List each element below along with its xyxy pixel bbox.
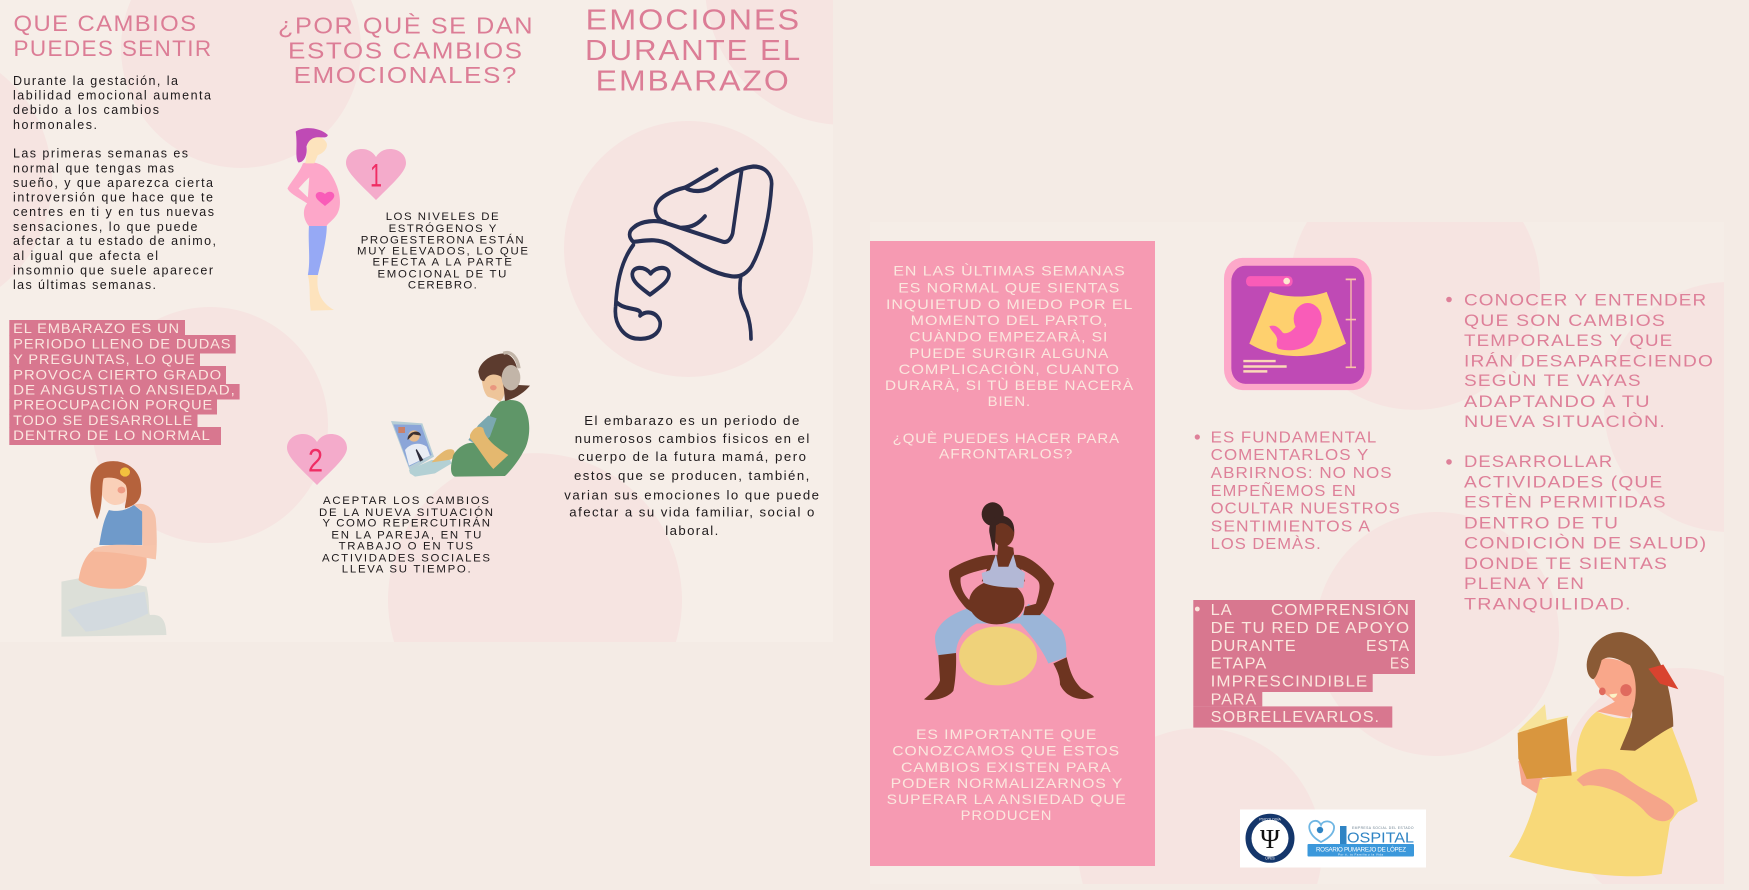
list: es fundamental comentarlos: COMENTARLOS Y [1211,447,1369,464]
text block: las primeras semanas: Las primeras semanas es [13,147,188,161]
text block: ultimas semanas: INQUIETUD O MIEDO POR EL [886,297,1133,312]
text block: es importante que conozcamos: ES IMPORTANTE QUE [916,727,1097,742]
text block: durante la gestacion: labilidad emocional aumenta [13,88,211,102]
title: emociones durante el embarazo: DURANTE EL [585,35,802,67]
text block: durante la gestacion [13,74,211,132]
text block: el embarazo es un periodo [564,413,819,538]
list: conocer y desarrollar: IRÁN DESAPARECIENDO [1464,352,1714,371]
text block: el embarazo es un periodo: cuerpo de la futura mamá, pero [578,449,806,464]
text block: ultimas semanas: ES NORMAL QUE SIENTAS [898,280,1120,295]
logo: psicologia: Ψ [1260,824,1280,854]
callout: el embarazo es un periodo: PREOCUPACIÒN PORQUE [13,398,213,413]
callout: la comprension de tu red de apoyo: ESTA [1366,638,1410,655]
text block: las primeras semanas: sensaciones, lo que puede [13,220,198,234]
text block: el embarazo es un periodo: laboral. [665,523,718,538]
icon: pregnant belly line art [615,166,772,339]
heading: que cambios puedes sentir: QUE CAMBIOS [14,11,198,36]
logos: psicologia and hospital [1240,810,1426,868]
text block: el embarazo es un periodo: El embarazo es un periodo de [584,413,799,428]
icon: heart number 2: 2 [308,442,323,478]
text block: ultimas semanas: EN LAS ÙLTIMAS SEMANAS [893,262,1126,278]
text block: aceptar los cambios: Y COMO REPERCUTIRÁN [322,517,490,530]
list: es fundamental comentarlos: ES FUNDAMENTAL [1211,429,1377,446]
heading: por que se dan estos cambios: ESTOS CAMBIOS [288,37,524,63]
text block: ultimas semanas: ¿QUÈ PUEDES HACER PARA [893,430,1120,446]
list: conocer y desarrollar: DESARROLLAR [1464,453,1613,471]
list: conocer y desarrollar: DONDE TE SIENTAS [1464,555,1668,573]
callout: la comprension de tu red de apoyo: DURANTE [1211,638,1297,655]
text block: niveles de estrogenos: LOS NIVELES DE [386,211,499,223]
icon: heart number 2 [287,434,347,485]
panel: right brochure background [870,222,1724,884]
list: conocer y desarrollar: QUE SON CAMBIOS [1464,312,1666,330]
panel: left brochure background [0,0,833,642]
callout: la comprension de tu red de apoyo: ES [1390,656,1410,673]
text block: aceptar los cambios: EN LA PAREJA, EN TU [331,530,481,542]
list: es fundamental comentarlos: EMPEÑEMOS EN [1211,480,1357,500]
text block: durante la gestacion: debido a los cambios [13,103,159,117]
list: es fundamental comentarlos [1195,429,1401,553]
illustration: woman on birth ball [924,502,1094,700]
list: conocer y desarrollar: CONOCER Y ENTENDER [1464,292,1707,310]
text block: es importante que conozcamos: CAMBIOS EXISTEN PARA [901,760,1112,775]
logo: hospital: ROSARIO PUMAREJO DE LÓPEZ [1316,846,1406,854]
illustration: pregnant woman standing [287,128,340,311]
text block: aceptar los cambios: ACEPTAR LOS CAMBIOS [323,495,489,507]
list: es fundamental comentarlos: SENTIMIENTOS A [1211,518,1371,536]
text block: aceptar los cambios [319,495,493,576]
text block: las primeras semanas: al igual que afecta el [13,249,158,263]
callout: la comprension de tu red de apoyo: LA [1211,602,1233,619]
heading: por que se dan estos cambios: ¿POR QUÈ SE DAN [278,12,534,38]
list: conocer y desarrollar: TRANQUILIDAD. [1464,595,1632,613]
list: conocer y desarrollar: ACTIVIDADES (QUE [1464,474,1663,492]
illustration: seated pregnant woman [61,461,166,637]
logo: psicologia: UPES [1265,856,1275,860]
text block: ultimas semanas: MOMENTO DEL PARTO, [911,313,1108,328]
list: conocer y desarrollar: CONDICIÒN DE SALUD) [1464,534,1707,553]
list: conocer y desarrollar: PLENA Y EN [1464,575,1585,593]
heading: que cambios puedes sentir [14,11,212,61]
illustration: pregnant woman reading [1509,632,1698,876]
callout: la comprension de tu red de apoyo: DE TU RED DE APOYO [1211,620,1410,637]
text block: es importante que conozcamos [887,727,1127,823]
text block: es importante que conozcamos: SUPERAR LA ANSIEDAD QUE [887,792,1127,807]
callout: el embarazo es un periodo: Y PREGUNTAS, LO QUE [13,352,196,367]
text block: ultimas semanas: BIEN. [988,394,1031,409]
title: emociones durante el embarazo: EMBARAZO [596,66,791,98]
text block: aceptar los cambios: ACTIVIDADES SOCIALES [322,553,490,565]
callout: el embarazo es un periodo: TODO SE DESARROLLE [13,413,193,428]
heading: por que se dan estos cambios [278,12,534,88]
text block: niveles de estrogenos: PROGESTERONA ESTÁN [361,233,524,246]
list: es fundamental comentarlos: OCULTAR NUESTROS [1211,501,1401,518]
logo: hospital: EMPRESA SOCIAL DEL ESTADO [1352,826,1414,830]
text block: niveles de estrogenos: MUY ELEVADOS, LO QUE [357,245,528,257]
text block: las primeras semanas: insomnio que suele aparecer [13,264,213,278]
text block: niveles de estrogenos [357,211,528,292]
callout: el embarazo es un periodo [9,320,240,445]
text block: niveles de estrogenos: CEREBRO. [408,280,477,292]
icon: ultrasound screen [1224,258,1372,390]
icon: heart number 1: 1 [370,158,382,194]
callout: el embarazo es un periodo: EL EMBARAZO ES UN [13,321,180,336]
text block: el embarazo es un periodo: varian sus emociones lo que puede [564,487,819,502]
list: es fundamental comentarlos: LOS DEMÀS. [1211,534,1322,553]
logo: hospital: OSPITAL [1347,830,1414,846]
logo: psicologia [1248,817,1292,860]
list: conocer y desarrollar: ESTÈN PERMITIDAS [1464,493,1667,512]
text block: aceptar los cambios: DE LA NUEVA SITUACIÓN [319,506,493,519]
text block: aceptar los cambios: LLEVA SU TIEMPO. [342,564,471,576]
text block: aceptar los cambios: TRABAJO O EN TUS [339,541,473,553]
text block: las primeras semanas [13,147,216,292]
list: conocer y desarrollar: SEGÙN TE VAYAS [1464,371,1642,390]
callout: la comprension de tu red de apoyo: SOBRELLEVARLOS. [1211,709,1380,726]
callout: la comprension de tu red de apoyo: IMPRESCINDIBLE [1211,674,1368,690]
illustration: woman with laptop [391,353,530,477]
text block: es importante que conozcamos: PRODUCEN [961,808,1052,823]
text block: ultimas semanas [885,262,1134,462]
text block: es importante que conozcamos: PODER NORMALIZARNOS Y [891,776,1123,791]
text block: el embarazo es un periodo: numerosos cambios fisicos en el [575,431,809,446]
title: emociones durante el embarazo: EMOCIONES [586,4,801,36]
list: conocer y desarrollar: DENTRO DE TU [1464,514,1619,532]
callout: el embarazo es un periodo: PROVOCA CIERTO GRADO [13,367,222,382]
text block: las primeras semanas: afectar a tu estado de animo, [13,234,216,248]
text block: ultimas semanas: PUEDE SURGIR ALGUNA [909,346,1109,361]
callout: la comprension de tu red de apoyo [1193,600,1415,728]
title: emociones durante el embarazo [585,4,802,98]
callout: el embarazo es un periodo: DENTRO DE LO NORMAL [13,428,211,443]
text block: las primeras semanas: centres en ti y en tus nuevas [13,205,214,219]
icon: heart number 1 [346,149,406,200]
callout: el embarazo es un periodo: PERIODO LLENO DE DUDAS [13,337,231,352]
text block: ultimas semanas: CUÀNDO EMPEZARÀ, SI [909,328,1108,344]
logo: hospital: Por ti, tu Familia y la Vida [1338,853,1383,857]
text block: ultimas semanas: DURARÀ, SI TÙ BEBE NACERÀ [885,377,1134,393]
list: conocer y desarrollar [1446,292,1714,613]
text block: durante la gestacion: Durante la gestación, la [13,74,178,88]
text block: ultimas semanas: AFRONTARLOS? [939,446,1073,462]
heading: por que se dan estos cambios: EMOCIONALES? [294,62,518,88]
heading: que cambios puedes sentir: PUEDES SENTIR [14,36,212,61]
logo: hospital [1308,821,1414,857]
panel: pink column [870,241,1155,866]
text block: niveles de estrogenos: EFECTA A LA PARTE [372,257,512,269]
callout: la comprension de tu red de apoyo: PARA [1211,691,1257,708]
list: conocer y desarrollar: TEMPORALES Y QUE [1464,332,1673,350]
text block: durante la gestacion: hormonales. [13,118,97,132]
text block: niveles de estrogenos: EMOCIONAL DE TU [378,269,506,281]
callout: el embarazo es un periodo: DE ANGUSTIA O ANSIEDAD, [13,382,236,397]
callout: la comprension de tu red de apoyo: ETAPA [1211,656,1267,673]
list: conocer y desarrollar: NUEVA SITUACIÒN. [1464,412,1666,431]
callout: la comprension de tu red de apoyo: COMPRENSIÓN [1271,600,1410,619]
list: conocer y desarrollar: ADAPTANDO A TU [1464,393,1651,411]
text block: las primeras semanas: normal que tengas mas [13,161,174,175]
list: es fundamental comentarlos: ABRIRNOS: NO NOS [1211,465,1393,482]
text block: ultimas semanas: COMPLICACIÒN, CUANTO [899,361,1120,377]
text block: niveles de estrogenos: ESTRÓGENOS Y [389,222,497,235]
text block: el embarazo es un periodo: afectar a su vida familiar, social o [569,505,814,520]
text block: las primeras semanas: sueño, y que aparezca cierta [13,176,213,190]
text block: las primeras semanas: introversión que hace que te [13,191,213,205]
logo: psicologia: PSICOLOGÍA [1259,818,1281,822]
text block: las primeras semanas: las últimas semanas. [13,278,156,292]
text block: el embarazo es un periodo: estos que se producen, también, [574,468,809,483]
text block: es importante que conozcamos: CONOZCAMOS QUE ESTOS [892,744,1120,759]
